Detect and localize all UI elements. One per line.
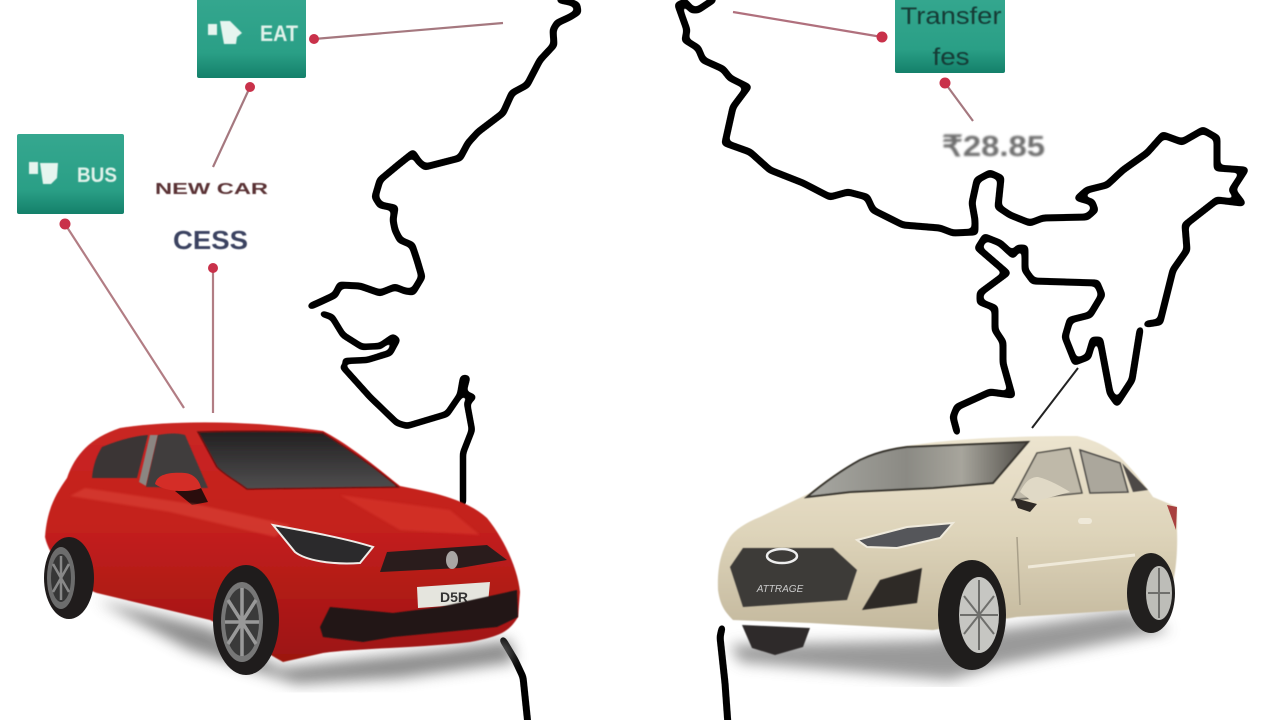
connector: map to Transfer box: [733, 12, 888, 42]
grille: [380, 545, 507, 572]
label: price: ₹28.85: [942, 131, 1045, 163]
map of India outline: [311, 0, 1245, 720]
label: Transfer: Transfer: [900, 3, 1002, 30]
car body: [45, 422, 520, 662]
label: fee: fes: [932, 44, 970, 71]
connector: EAT to new car label: [213, 82, 255, 167]
lower bumper intake: [320, 590, 518, 642]
leader: map to beige car: [1032, 368, 1078, 428]
front wheel: [938, 560, 1006, 670]
label: BUS: BUS: [77, 164, 117, 187]
body highlight: [70, 488, 290, 537]
fog lamp surround: [862, 568, 922, 610]
front wheel: [213, 565, 279, 675]
rear side window: [92, 435, 148, 478]
license plate: D5R: [440, 589, 468, 605]
rear wheel: [1127, 553, 1175, 633]
map: west coast upper: [311, 0, 578, 306]
connector: Transfer box to price: [940, 78, 973, 121]
rear wheel: [44, 537, 94, 619]
label: CESS: CESS: [173, 225, 248, 255]
door handle: [1078, 518, 1092, 524]
label: EAT: EAT: [260, 21, 298, 46]
tail light: [1167, 505, 1177, 530]
icon: EAT glyph: [208, 21, 242, 44]
front side window: [146, 434, 208, 488]
grille badge: [756, 549, 804, 595]
door crease: [1028, 555, 1135, 567]
car: red hatchback: [44, 422, 520, 684]
map: north border: [678, 0, 1245, 324]
box: BUS: [17, 134, 124, 214]
rear quarter window: [1122, 463, 1148, 492]
grille badge: ATTRAGE: [756, 584, 804, 595]
map: south-east coast: [953, 237, 1140, 432]
rear side window: [1080, 450, 1128, 493]
windshield: [807, 442, 1028, 497]
car shadow: [730, 610, 1170, 680]
license plate: [417, 582, 490, 608]
label: NEW CAR: NEW CAR: [155, 181, 269, 198]
connector: BUS to red car: [60, 218, 184, 408]
door seam: [1017, 537, 1020, 605]
grille: [730, 548, 857, 607]
headlight: [273, 525, 373, 563]
car: beige hatchback: [718, 436, 1177, 680]
map: red car tail: [503, 640, 528, 720]
door mirror: [1014, 477, 1070, 512]
map: lower coast: [343, 367, 473, 503]
map: beige car tail: [720, 628, 728, 720]
hood highlight: [340, 495, 480, 535]
map: gulf curve: [323, 314, 397, 361]
badge: [446, 551, 458, 569]
car body: [718, 436, 1177, 630]
windshield: [198, 431, 398, 489]
icon: BUS glyph: [29, 162, 58, 184]
box: Transfer fee: [895, 0, 1005, 73]
front side window: [1012, 448, 1082, 500]
door mirror: [155, 473, 208, 505]
door pillar: [139, 435, 158, 486]
connector: CESS to red car: [208, 263, 218, 413]
front tyre under bumper: [742, 625, 810, 655]
box: EAT: [197, 0, 306, 78]
connector: EAT to map: [309, 23, 503, 44]
headlight: [857, 523, 953, 548]
car shadow: [97, 600, 515, 684]
